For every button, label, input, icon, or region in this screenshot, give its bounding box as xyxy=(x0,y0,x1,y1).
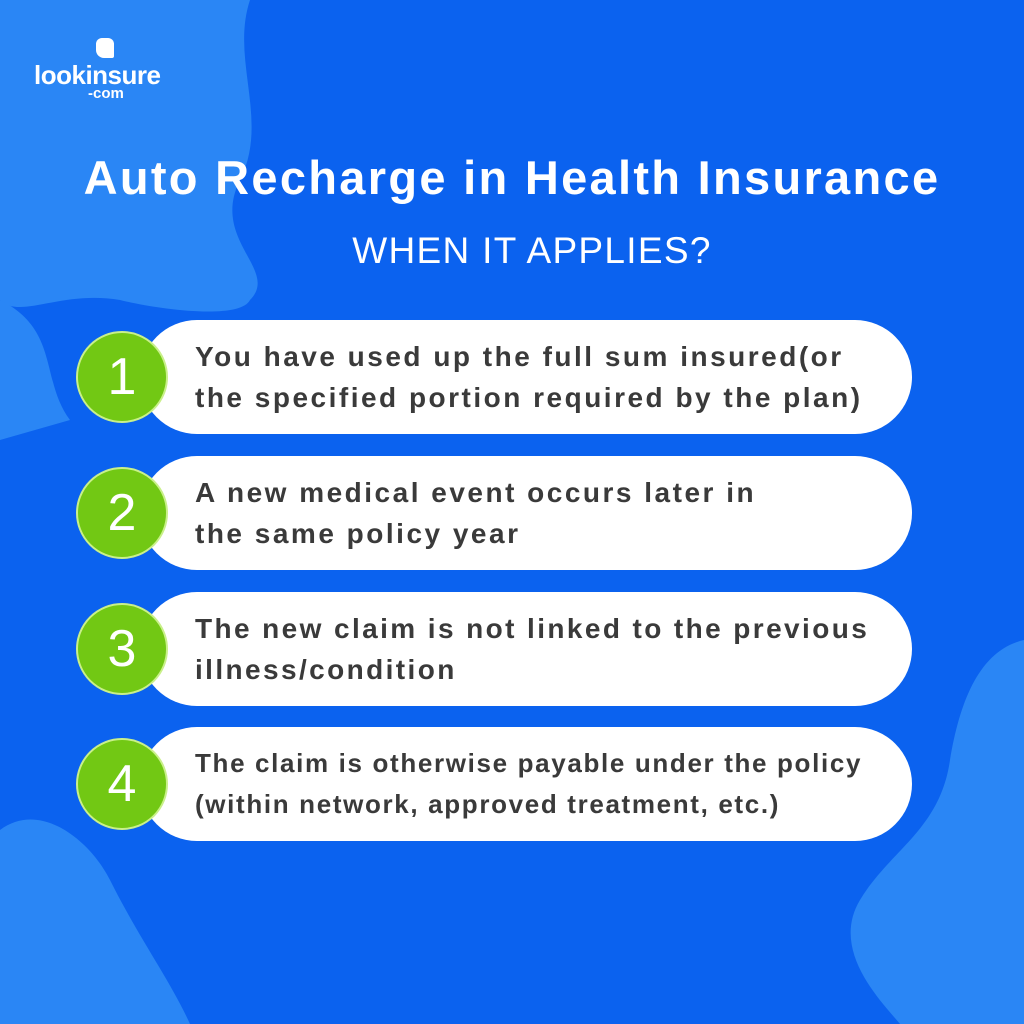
item 4: The claim is otherwise payable under the policy xyxy=(195,748,862,778)
item 1: 1 xyxy=(108,348,136,406)
item 3 xyxy=(76,592,912,706)
item 3: The new claim is not linked to the previous xyxy=(195,613,869,644)
item 3: 3 xyxy=(108,620,136,678)
title: Auto Recharge in Health Insurance xyxy=(84,151,940,204)
logo: -com xyxy=(88,85,124,102)
icon: mascot xyxy=(96,38,114,58)
item 2: A new medical event occurs later in xyxy=(195,477,756,508)
logo xyxy=(34,38,160,102)
logo: lookinsure xyxy=(34,60,160,90)
subtitle: WHEN IT APPLIES? xyxy=(352,230,712,271)
item 4: (within network, approved treatment, etc.) xyxy=(195,789,780,819)
item 4: 4 xyxy=(108,755,136,813)
item 1: You have used up the full sum insured(or xyxy=(195,341,844,372)
item 3: illness/condition xyxy=(195,654,457,685)
item 1 xyxy=(76,320,912,434)
item 2: 2 xyxy=(108,484,136,542)
item 2 xyxy=(76,456,912,570)
item 2: the same policy year xyxy=(195,518,520,549)
item 1: the specified portion required by the plan) xyxy=(195,382,863,413)
item 4 xyxy=(76,727,912,841)
